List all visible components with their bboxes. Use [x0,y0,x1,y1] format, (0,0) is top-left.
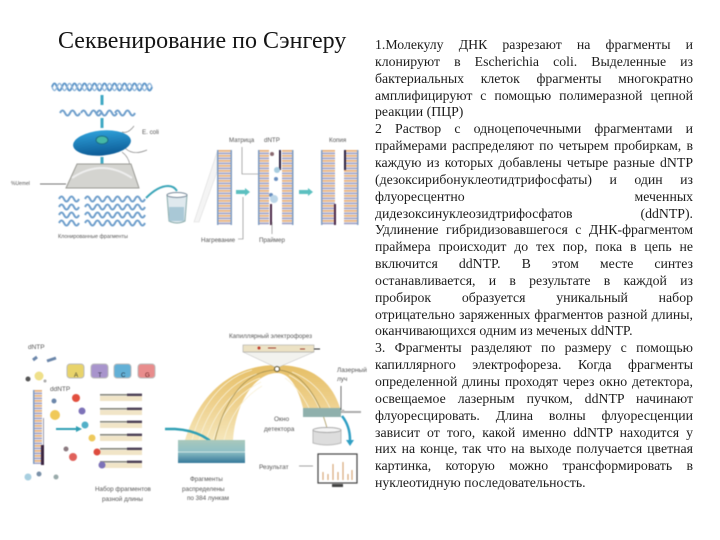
icon: gel plate [178,440,245,463]
text block: method steps: бактериальных клеток фрагменты многократно [375,71,693,86]
arrow: down [98,95,106,170]
chart: capillary arch [185,365,340,440]
text block: method steps: флуоресцировать. Длина волны флуоресценции [375,408,693,423]
label: capillary electrophoresis: Капиллярный электрофорез [229,332,312,340]
text block: method steps: амплифицируют с помощью полимеразной цепной [375,88,693,103]
panel: capillary electrophoresis [165,332,367,502]
text block: method steps: капиллярного электрофореза. Когда фрагменты [375,357,693,372]
text block: method steps: флуоресцентно меченных [375,189,693,204]
title: Секвенирование по Сэнгеру [58,28,346,54]
icon: detector base [313,428,341,445]
panel: cloning [11,84,187,240]
icon: DNA ladder 4 [321,150,336,225]
label: primer: Праймер [259,237,285,244]
text block: method steps [375,37,693,490]
text block: method steps: 3. Фрагменты разделяют по размеру с помощью [375,340,693,355]
icon: ddNTP molecules [24,398,77,480]
icon: capillary inset [243,345,320,372]
icon: reaction tubes A T C G: C [121,372,126,379]
icon: cloned fragments [59,196,145,226]
panel: termination reactions [24,344,155,503]
icon: DNA ladder 1 [217,150,232,225]
text block: method steps: картинка, которую можно трансформировать в [375,458,693,473]
zoom wedge [194,152,217,222]
chart: fragment set [72,394,142,468]
leader: result [299,465,313,467]
text block: method steps: зависит от того, какой именно ddNTP находится у [375,425,693,440]
label: fragment set: Набор фрагментов [95,485,152,493]
label: detector: детектора [264,426,295,433]
text block: method steps: Удлинение гибридизовавшегося с ДНК-фрагментом [375,222,693,237]
text block: method steps: (дезоксирибонуклеотидтрифосфаты) и один из [375,172,693,187]
label: ddNTP: ddNTP [50,386,70,393]
label: distributed: распределены [182,486,225,493]
text block: method steps: реакции (ПЦР) [375,104,463,119]
label: copy: Копия [329,137,346,144]
label: tray: %Uemel [11,181,30,187]
label: different length: разной длины [102,495,143,503]
text block: method steps: дидезоксинуклеозидтрифосфатов (ddNTP). [375,206,693,220]
icon: DNA ladder 5 [344,150,358,225]
icon: DNA ladder 2 template [258,150,272,225]
text block: method steps: 2 Раствор с одноцепочечными фрагментами и [375,121,693,136]
icon: result monitor [318,454,357,487]
icon: DNA ladder 3 [279,150,294,225]
arrow: copy [299,188,313,196]
arrow: to fragments [56,426,82,432]
text block: method steps: отрицательно заряженных фрагментов разной длины, [375,307,693,322]
icon: detector window [303,408,361,417]
text block: method steps: праймерами распределяют по четырем пробиркам, в [375,138,693,153]
icon: DNA fragments [60,110,135,116]
text block: method steps: пробирок образуется уникальный набор [375,290,693,305]
icon: culture tray [40,164,139,188]
text block: method steps: 1.Молекулу ДНК разрезают на фрагменты и [375,37,693,52]
icon: E. coli bacterium [72,126,147,168]
icon: beaker [167,192,187,223]
text block: method steps: нуклеотидную последовательность. [375,475,586,490]
arrow: into gel [165,429,221,453]
label: result: Результат [259,464,289,471]
text block: method steps: определенной длины проходят через окно детектора, [375,374,693,389]
text block: method steps: оканчивающихся одним из меченых ddNTP. [375,323,633,338]
text block: method steps: них на конце, так что на выходе получается цветная [375,441,693,456]
label: detector window: Окно [274,416,289,423]
icon: reaction tubes A T C G: G [145,372,150,379]
label: heating: Нагревание [201,237,236,244]
text block: method steps: клонируют в Escherichia coli. Выделенные из [375,54,693,69]
text block: method steps: каждую из которых добавлены четыре разные dNTP [375,155,693,170]
label: laser beam: Лазерный [337,366,367,374]
text block: method steps: праймера происходит до тех пор, пока в цепь не [375,239,693,254]
label: E. coli: E. coli [142,129,159,136]
label: template: Матрица [229,137,255,144]
label: fragments: Фрагменты [190,476,223,483]
text block: method steps: включится ddNTP. В этом месте синтез [375,256,693,271]
text block: method steps: освещаемое лазерным пучком, ddNTP начинают [375,391,693,406]
label: by lanes: по 384 лункам [187,495,229,502]
label: dNTP: dNTP [264,137,280,144]
icon: template strand [33,390,44,465]
text block: method steps: останавливается, и в результате в каждой из [375,273,693,288]
icon: reaction tubes A T C G [67,364,155,379]
label: dNTP: dNTP [28,344,45,351]
icon: dNTP molecules [269,152,280,203]
laser line [340,386,342,410]
label: beam: луч [337,376,347,383]
arrow: heat [236,188,250,196]
icon: free nucleotides [26,357,56,382]
panel: annealing and extension [194,137,358,244]
icon: reaction tubes A T C G: T [98,372,102,379]
leader lines [238,147,272,239]
label: cloned fragments: Клонированные фрагменты [58,234,128,240]
arrow: to beaker [146,186,177,198]
icon: reaction tubes A T C G: A [74,372,79,379]
icon: genomic DNA [52,84,152,90]
arrow: to result [342,416,350,440]
